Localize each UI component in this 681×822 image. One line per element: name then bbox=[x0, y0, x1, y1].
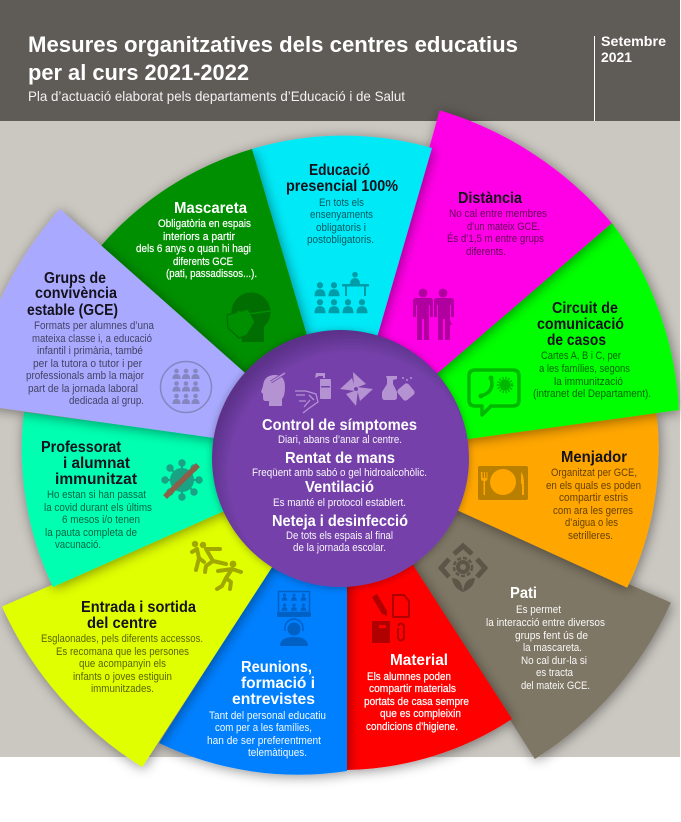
heading: Circuit: comunicació bbox=[537, 316, 624, 333]
text: Distància: És d’1,5 m entre grups bbox=[447, 232, 544, 245]
title: Mesures organitzatives dels centres educatius bbox=[28, 32, 518, 57]
panel: Pati bbox=[340, 458, 670, 758]
heading: Educació presencial: presencial 100% bbox=[286, 178, 398, 195]
heading: Reunions: formació i bbox=[241, 675, 315, 692]
text: Distància: d’un mateix GCE. bbox=[467, 221, 540, 233]
text: Grups bbox=[26, 320, 155, 407]
icon: phone message bbox=[469, 370, 519, 415]
text: Grups: part de la jornada laboral bbox=[28, 383, 138, 395]
text: Educació presencial: obligatoris i bbox=[316, 222, 366, 234]
text: Reunions: telemàtiques. bbox=[248, 747, 307, 759]
text: Distància bbox=[447, 208, 547, 258]
panel: Menjador bbox=[340, 413, 658, 587]
panel: Grups de convivència estable bbox=[0, 210, 340, 458]
heading: Entrada i sortida: Entrada i sortida bbox=[81, 599, 196, 616]
text: Menjador: d’aigua o les bbox=[565, 517, 618, 529]
text: Reunions: Tant del personal educatiu bbox=[209, 710, 326, 722]
heading: Circuit: de casos bbox=[547, 332, 606, 349]
panel: central circle bbox=[212, 330, 469, 587]
text: ventilació bbox=[273, 479, 406, 509]
text: Material: condicions d’higiene. bbox=[366, 721, 458, 733]
heading: Professorat: i alumnat bbox=[63, 455, 130, 472]
heading: Entrada i sortida bbox=[81, 599, 196, 632]
text: Circuit: a les famílies, segons bbox=[539, 363, 630, 375]
heading: Material: Material bbox=[390, 652, 448, 669]
heading: Grups: convivència bbox=[35, 285, 117, 302]
heading: Menjador: Menjador bbox=[561, 449, 627, 466]
icon: group in circle bbox=[160, 362, 212, 412]
heading: Grups: estable (GCE) bbox=[27, 302, 118, 319]
panel: Material bbox=[340, 458, 512, 770]
text: Pati: es tracta bbox=[536, 667, 574, 679]
text: neteja i desinfecció: de la jornada escolar. bbox=[293, 542, 386, 554]
icon: pinwheel bbox=[340, 372, 373, 406]
heading: Grups bbox=[27, 270, 118, 319]
text: Entrada i sortida bbox=[41, 633, 203, 695]
title bbox=[28, 32, 518, 85]
icon: flower bbox=[441, 546, 485, 592]
text: Mascareta: diferents GCE bbox=[173, 256, 233, 268]
date bbox=[594, 34, 667, 121]
text: Professorat: Ho estan si han passat bbox=[47, 489, 146, 501]
heading: Entrada i sortida: del centre bbox=[87, 615, 157, 632]
icon: washing hands bbox=[295, 373, 331, 413]
text: neteja i desinfecció: De tots els espais al final bbox=[286, 530, 393, 542]
text: Grups: infantil i primària, també bbox=[37, 345, 143, 357]
text: Grups: Formats per alumnes d’una bbox=[34, 320, 155, 332]
panel: Professorat i alumnat immunitzat bbox=[22, 412, 340, 587]
text: Menjador: setrilleres. bbox=[568, 530, 613, 542]
text: Professorat: la covid durant els últims bbox=[44, 502, 152, 514]
heading: Grups: Grups de bbox=[44, 270, 106, 287]
icon: two people bbox=[413, 289, 454, 340]
icon: spray and cloth bbox=[382, 376, 416, 402]
text: Grups: mateixa classe i, a educació bbox=[32, 333, 152, 345]
text: Educació presencial: ensenyaments bbox=[310, 209, 373, 221]
text: Reunions: com per a les famílies, bbox=[215, 722, 312, 734]
text: Mascareta: (pati, passadissos...). bbox=[166, 268, 257, 280]
title: per al curs 2021-2022 bbox=[28, 60, 249, 85]
text: Reunions: han de ser preferentment bbox=[207, 735, 321, 747]
header band bbox=[0, 0, 680, 121]
icon: head with thermometer bbox=[261, 373, 285, 406]
text: Distància: diferents. bbox=[466, 246, 506, 258]
text: Material: compartir materials bbox=[369, 683, 456, 695]
text: Mascareta bbox=[136, 218, 257, 280]
text: Pati: No cal dur-la si bbox=[521, 655, 587, 667]
text: Pati: del mateix GCE. bbox=[521, 680, 590, 692]
heading: Professorat bbox=[41, 439, 137, 488]
text: Material: portats de casa sempre bbox=[364, 696, 469, 708]
text: ventilació: Ventilació bbox=[305, 479, 374, 496]
text: neteja i desinfecció: Neteja i desinfecció bbox=[272, 513, 408, 530]
heading: Mascareta: Mascareta bbox=[174, 200, 247, 217]
page background bbox=[0, 121, 680, 757]
text: Educació presencial: En tots els bbox=[319, 197, 364, 209]
text: Menjador bbox=[546, 467, 641, 542]
text: Grups: dedicada al grup. bbox=[69, 395, 144, 407]
text: Material: que es compleixin bbox=[380, 708, 461, 720]
heading: Reunions bbox=[232, 659, 315, 708]
text: Grups: per la tutora o tutor i per bbox=[33, 358, 142, 370]
text: Pati: Es permet bbox=[516, 604, 561, 616]
text: Professorat: vacunació. bbox=[55, 539, 101, 551]
text: Educació presencial: postobligatoris. bbox=[307, 234, 374, 246]
text: control de símptomes bbox=[262, 417, 417, 446]
text: Entrada i sortida: immunitzades. bbox=[91, 683, 154, 695]
text: Menjador: en els quals es poden bbox=[546, 480, 641, 492]
icon: head with mask bbox=[227, 292, 270, 342]
text: Mascareta: dels 6 anys o quan hi hagi bbox=[136, 243, 251, 255]
text: Pati: la interacció entre diversos bbox=[486, 617, 605, 629]
icon: plate bbox=[478, 466, 528, 500]
text: Mascareta: interiors a partir bbox=[163, 231, 235, 243]
text: Entrada i sortida: Esglaonades, pels diferents accessos. bbox=[41, 633, 203, 645]
text: Material bbox=[364, 671, 469, 733]
text: rentat de mans: Freqüent amb sabó o gel hidroalcohòlic. bbox=[252, 467, 427, 479]
text: rentat de mans bbox=[252, 450, 427, 479]
text: Pati: grups fent ús de bbox=[515, 630, 588, 642]
heading: Reunions: entrevistes bbox=[232, 691, 315, 708]
text: Mascareta: Obligatòria en espais bbox=[158, 218, 251, 230]
text: Pati bbox=[486, 604, 605, 692]
text: Circuit: la immunització bbox=[554, 376, 623, 388]
panel: Entrada i sortida bbox=[3, 458, 340, 766]
icon: runners bbox=[192, 541, 241, 589]
heading: Professorat: Professorat bbox=[41, 439, 121, 456]
panel: Distància bbox=[340, 111, 611, 458]
text: control de símptomes: Control de símptomes bbox=[262, 417, 417, 434]
text: Professorat: la pauta completa de bbox=[45, 527, 137, 539]
date: 2021 bbox=[601, 50, 632, 65]
heading: Professorat: immunitzat bbox=[55, 471, 137, 488]
heading: Distància: Distància bbox=[458, 190, 522, 207]
icon: crossed virus bbox=[162, 460, 202, 500]
text: ventilació: Es manté el protocol establert. bbox=[273, 497, 406, 509]
text: Pati: la mascareta. bbox=[523, 642, 582, 654]
text: Menjador: compartir estris bbox=[559, 492, 628, 504]
text: Entrada i sortida: infants o joves estiguin bbox=[73, 671, 172, 683]
date: Setembre bbox=[601, 34, 667, 49]
heading: Circuit bbox=[537, 300, 624, 349]
heading: Educació presencial bbox=[286, 162, 398, 195]
text: Menjador: Organitzat per GCE, bbox=[551, 467, 637, 479]
text: Material: Els alumnes poden bbox=[367, 671, 451, 683]
icon: stationery bbox=[372, 594, 409, 643]
icon: classroom bbox=[314, 272, 369, 313]
text: neteja i desinfecció bbox=[272, 513, 408, 554]
panel: Educació presencial bbox=[252, 136, 432, 458]
text: Distància: No cal entre membres bbox=[449, 208, 547, 220]
panel: Mascareta bbox=[100, 149, 340, 458]
text: Menjador: com ara les gerres bbox=[553, 505, 633, 517]
text: control de símptomes: Diari, abans d’anar al centre. bbox=[278, 434, 402, 446]
icon: video meeting bbox=[277, 592, 311, 646]
heading: Reunions: Reunions, bbox=[241, 659, 312, 676]
text: Professorat bbox=[44, 489, 152, 551]
panel: Circuit de comunicació de casos bbox=[340, 223, 679, 458]
text: Professorat: 6 mesos i/o tenen bbox=[62, 514, 140, 526]
text: Circuit: Cartes A, B i C, per bbox=[541, 350, 621, 362]
heading: Circuit: Circuit de bbox=[552, 300, 618, 317]
text: Entrada i sortida: Es recomana que les persones bbox=[56, 646, 189, 658]
panel: Reunions bbox=[159, 458, 347, 775]
text: Entrada i sortida: que acompanyin els bbox=[79, 658, 166, 670]
heading: Educació presencial: Educació bbox=[309, 162, 370, 179]
text: rentat de mans: Rentat de mans bbox=[285, 450, 395, 467]
heading: Pati: Pati bbox=[510, 585, 537, 602]
text: Grups: professionals amb la major bbox=[26, 370, 144, 382]
text: Circuit bbox=[533, 350, 651, 400]
text: Educació presencial bbox=[307, 197, 374, 246]
subtitle: Pla d’actuació elaborat pels departaments d’Educació i de Salut bbox=[28, 88, 405, 104]
text: Reunions bbox=[207, 710, 326, 759]
text: Circuit: (intranet del Departament). bbox=[533, 388, 651, 400]
